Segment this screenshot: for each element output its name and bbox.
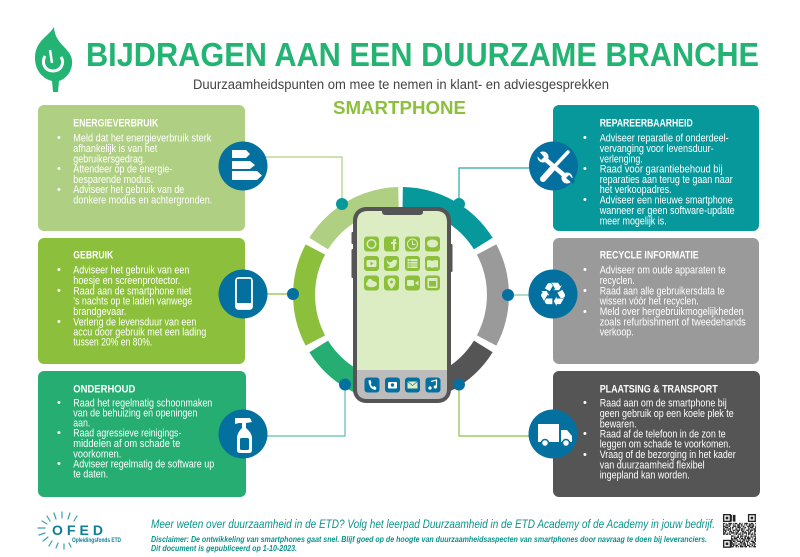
icon: energy label	[218, 142, 268, 190]
icon: spray bottle	[218, 410, 268, 458]
text: plaatsing en transport: van duurzaamheid flexibel	[600, 460, 705, 472]
text: energieverbruik: donkere modus en achtergronden.	[73, 194, 212, 206]
bottom ring dots	[339, 378, 465, 390]
footer: disclaimer: Dit document is gepubliceerd op 1-10-2023.	[151, 544, 297, 553]
text: gebruik: brandgevaar.	[73, 306, 126, 318]
text: plaatsing en transport: bewaren.	[600, 418, 637, 430]
text: onderhoud: Raad agressieve reinigings-	[73, 428, 182, 440]
title: BIJDRAGEN AAN EEN DUURZAME BRANCHE	[86, 36, 759, 73]
text: recycle informatie: zoals refurbishment of tweedehands	[600, 316, 746, 328]
panel: gebruik	[38, 238, 245, 364]
text: onderhoud: •	[57, 458, 61, 470]
text: energieverbruik	[57, 132, 212, 206]
panel: energieverbruik	[38, 105, 245, 231]
text: repareerbaarheid: het verkoopadres.	[600, 184, 672, 196]
text: repareerbaarheid: Raad voor garantiebehoud bij	[600, 164, 723, 176]
text: plaatsing en transport: geen gebruik op een koele plek te	[600, 408, 734, 420]
text: repareerbaarheid: wanneer er geen software-update	[599, 205, 735, 217]
text: energieverbruik: afhankelijk is van het	[73, 143, 157, 155]
text: recycle informatie: Adviseer om oude apparaten te	[600, 264, 726, 276]
text: energieverbruik: gebruikersgedrag.	[73, 154, 145, 166]
heading: onderhoud: ONDERHOUD	[73, 384, 135, 396]
heading: plaatsing en transport: PLAATSING & TRANSPORT	[600, 384, 718, 396]
text: onderhoud: aan.	[73, 418, 90, 430]
qr code	[723, 515, 756, 547]
text: repareerbaarheid: •	[583, 194, 587, 206]
text: onderhoud: •	[57, 427, 61, 439]
text: recycle informatie: Meld over hergebruikmogelijkheden	[600, 306, 744, 318]
icon: truck	[528, 410, 578, 458]
app glyphs	[366, 238, 438, 289]
text: onderhoud: Adviseer regelmatig de software up	[73, 458, 214, 470]
text: gebruik: hoesje en screenprotector.	[73, 275, 180, 287]
text: energieverbruik: Adviseer het gebruik van de	[73, 184, 184, 196]
text: repareerbaarheid: verlenging.	[600, 154, 643, 166]
connector lines	[262, 157, 540, 436]
text: onderhoud: Raad het regelmatig schoonmaken	[73, 398, 212, 410]
text: energieverbruik: Meld dat het energieverbruik sterk	[73, 132, 212, 144]
smartphone illustration	[352, 207, 452, 403]
icon: tools	[529, 142, 578, 190]
footer: disclaimer: Disclaimer: De ontwikkeling van smartphones gaat snel. Blijf goed op de hoogte van duurzaamheidsaspecten van smartphones door navraag te doen bij leveranciers.	[151, 535, 707, 544]
text: repareerbaarheid	[583, 132, 735, 228]
text: recycle informatie: verkoop.	[600, 326, 634, 338]
text: onderhoud: •	[57, 397, 61, 409]
text: gebruik: •	[57, 316, 61, 328]
icon: leaf logo	[35, 27, 72, 92]
text: plaatsing en transport: Vraag of de bezorging in het kader	[600, 449, 736, 461]
ring connector dots	[287, 198, 514, 301]
app icons	[364, 236, 440, 290]
text: plaatsing en transport: •	[583, 449, 587, 461]
text: gebruik: 's nachts op te laden vanwege	[73, 296, 192, 308]
text: onderhoud: middelen af om schade te	[73, 438, 180, 450]
text: recycle informatie: •	[583, 264, 587, 276]
text: energieverbruik: Attendeer op de energie-	[73, 164, 173, 176]
text: recycle informatie	[583, 264, 746, 338]
text: repareerbaarheid: •	[583, 132, 587, 144]
text: repareerbaarheid: reparaties aan terug te gaan naar	[600, 174, 733, 186]
text: recycle informatie: •	[583, 306, 587, 318]
text: plaatsing en transport	[583, 397, 736, 482]
text: plaatsing en transport: leggen om schade te voorkomen.	[600, 438, 731, 450]
heading: energieverbruik: ENERGIEVERBRUIK	[73, 118, 158, 130]
text: gebruik: •	[57, 285, 61, 297]
text: onderhoud: van de behuizing en openingen	[73, 408, 197, 420]
footer: disclaimer	[151, 535, 707, 553]
text: energieverbruik: •	[57, 184, 61, 196]
text: gebruik: Adviseer het gebruik van een	[73, 264, 189, 276]
text: recycle informatie: recyclen.	[600, 275, 635, 287]
panel: repareerbaarheid	[553, 105, 759, 231]
text: onderhoud: te daten.	[73, 468, 108, 480]
text: gebruik	[57, 264, 206, 348]
icon: recycle: ♻	[538, 275, 568, 314]
logo: OFED: OFED	[52, 522, 103, 538]
heading: repareerbaarheid: REPAREERBAARHEID	[600, 118, 693, 130]
icon: recycle	[528, 270, 578, 318]
dock icons	[364, 378, 440, 392]
text: plaatsing en transport: Raad aan om de smartphone bij	[600, 398, 727, 410]
text: energieverbruik: •	[57, 132, 61, 144]
heading: smartphone: SMARTPHONE	[333, 98, 466, 118]
text: recycle informatie: Raad aan alle gebruikersdata te	[600, 286, 725, 298]
heading: recycle informatie: RECYCLE INFORMATIE	[600, 250, 699, 262]
text: plaatsing en transport: Raad af de telefoon in de zon te	[600, 428, 726, 440]
panel: onderhoud	[38, 371, 246, 497]
text: plaatsing en transport: •	[583, 428, 587, 440]
subtitle: Duurzaamheidspunten om mee te nemen in klant- en adviesgesprekken	[193, 77, 609, 92]
panel: plaatsing en transport	[553, 371, 760, 497]
icon: phone	[218, 270, 268, 318]
text: gebruik: accu door gebruik met een lading	[73, 326, 206, 338]
text: gebruik: Raad aan de smartphone niet	[73, 286, 191, 298]
text: energieverbruik: •	[57, 163, 61, 175]
text: recycle informatie: •	[583, 285, 587, 297]
text: repareerbaarheid: vervanging voor levensduur-	[600, 143, 714, 155]
text: plaatsing en transport: •	[583, 397, 587, 409]
text: energieverbruik: besparende modus.	[73, 174, 153, 186]
text: plaatsing en transport: ingepland kan worden.	[600, 470, 690, 482]
logo: OFED	[38, 512, 122, 549]
text: repareerbaarheid: Adviseer reparatie of onderdeel-	[600, 132, 729, 144]
text: repareerbaarheid: meer mogelijk is.	[600, 216, 667, 228]
text: repareerbaarheid: •	[583, 163, 587, 175]
text: onderhoud	[57, 397, 214, 480]
text: onderhoud: voorkomen.	[73, 448, 121, 460]
ring chart	[304, 198, 498, 392]
text: recycle informatie: wissen vóór het recyclen.	[599, 296, 699, 308]
heading: gebruik: GEBRUIK	[73, 250, 113, 262]
text: gebruik: •	[57, 264, 61, 276]
panel: recycle informatie	[553, 238, 759, 364]
text: gebruik: tussen 20% en 80%.	[73, 336, 152, 348]
text: repareerbaarheid: Adviseer een nieuwe smartphone	[600, 194, 733, 206]
text: gebruik: Verleng de levensduur van een	[73, 316, 196, 328]
logo: OFED: Opleidingsfonds ETD	[72, 538, 122, 544]
